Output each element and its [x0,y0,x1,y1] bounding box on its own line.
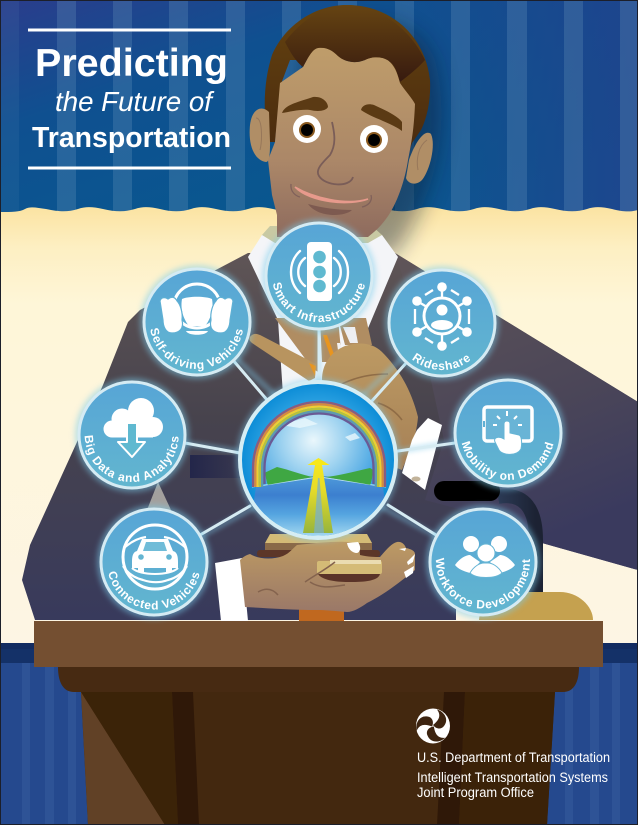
presenter: facial features [282,97,402,215]
icon: steering wheel and hands [160,284,233,335]
lower hand nails [347,542,415,578]
node: Workforce Development: Workforce Development [436,558,530,608]
crystal ball stand front [317,560,382,582]
tie bottom [299,600,344,621]
icon: traffic light [291,242,348,301]
upper hand creases [340,374,402,420]
suit light wedge [147,482,171,510]
icon: cloud download [104,398,163,457]
organization text: U.S. Department of Transportation [417,750,610,765]
node: Smart Infrastructure: Smart Infrastructure [273,282,365,322]
presenter: ears [250,108,433,184]
left shirt cuff [215,558,248,621]
icon: touch tablet [483,407,532,454]
right shirt cuff [402,418,442,490]
organization text: Joint Program Office [417,785,534,800]
node: Mobility on Demand [448,373,568,494]
lower hand creases [258,562,345,595]
title block: Predicting [35,42,228,85]
podium [34,621,603,825]
icon: three people [455,536,515,578]
node: Rideshare: Rideshare [412,352,470,370]
node: Connected Vehicles [94,502,214,622]
head shadow [300,21,442,262]
node: Big Data and Analytics [72,374,192,496]
suit shadow patch [190,455,240,478]
icon: connected car [123,525,187,589]
node: Big Data and Analytics: Big Data and Analytics [84,435,179,482]
gold microphone base [479,592,593,620]
title block: the Future of [55,86,215,117]
crystal ball [236,378,400,542]
upper hand palm [322,344,418,470]
node: Mobility on Demand: Mobility on Demand [462,441,554,480]
lower hand [240,542,415,612]
node: Smart Infrastructure [259,216,379,336]
cuff button [412,476,420,482]
neck [277,200,372,238]
presenter: hair crown [285,5,425,82]
suit sleeve highlight [395,253,638,570]
upper hand fingers [249,318,372,381]
node: Workforce Development [422,502,543,622]
shirt front [248,235,398,395]
presenter: hair [265,5,430,162]
presenter: face [268,48,415,237]
microphone stand [498,496,536,594]
node: Self-driving Vehicles: Self-driving Vehicles [150,328,243,372]
microphone head [434,481,500,501]
node: Connected Vehicles: Connected Vehicles [108,572,200,610]
crystal ball stand back [257,534,380,557]
presenter: suit jacket [22,253,638,620]
collar shadow [262,226,382,243]
title block [28,28,231,170]
icon: connected people network [412,282,472,351]
connector lines [132,275,507,562]
organization text: Intelligent Transportation Systems [417,770,608,785]
node: Rideshare [382,263,502,383]
title block: Transportation [32,122,231,154]
organization text [417,750,610,800]
node: Self-driving Vehicles [136,262,258,382]
USDOT logo [412,708,450,746]
